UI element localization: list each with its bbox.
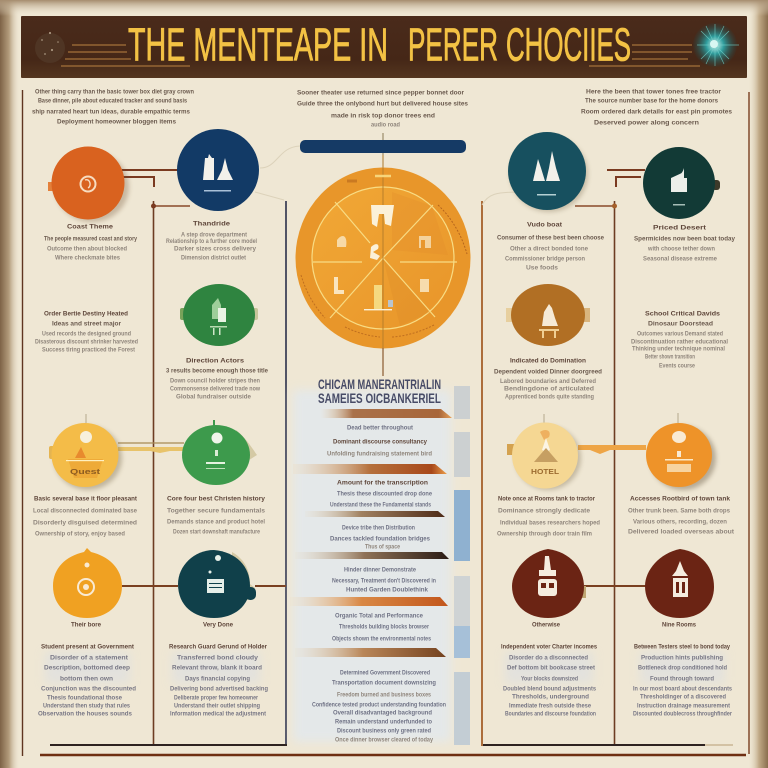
block: right middle text: Dinosaur Doorstead <box>648 320 713 328</box>
block: green circle two caption: Dozen start downshaft manufacture <box>173 528 260 536</box>
panel heading <box>318 376 441 406</box>
block: right middle text: Discontinuation rather educational <box>631 338 728 346</box>
intro text left: Other thing carry than the basic tower box diet gray crown <box>35 88 194 96</box>
block: teal circle caption: Use foods <box>526 264 559 272</box>
block: amber circle text: Understand then study that rules <box>43 702 130 710</box>
block: maroon circle text: Your blocks downsized <box>521 676 578 682</box>
block: dark teal circle text: Relevant throw, blank it board <box>172 664 262 672</box>
list item six: Transportation document downsizing <box>332 680 436 686</box>
block: maroon circle text <box>501 644 597 718</box>
block: right middle text: Events course <box>659 362 695 370</box>
intro text left: Deployment homeowner bloggen items <box>57 118 176 126</box>
block: green circle caption: 3 results become enough those title <box>166 368 268 374</box>
block: maroon circle text: Independent voter Charter incomes <box>501 644 597 650</box>
list item six: Overall disadvantaged background <box>333 710 432 716</box>
block: right middle text: School Critical Davids <box>645 310 720 318</box>
block: maroon circle text: Thresholds, underground <box>512 694 589 700</box>
icon labels row: Otherwise <box>532 622 560 628</box>
block: maroon circle two text: Instruction drainage measurement <box>637 702 730 710</box>
block: dark green circle caption <box>634 224 735 262</box>
block: maroon circle text: Boundaries and discourse foundation <box>505 710 596 718</box>
list item six: Discount business only green rated <box>337 728 431 734</box>
block: maroon circle two text: Thresholdinger of a discovered <box>640 694 726 700</box>
intro text centre <box>297 90 468 128</box>
list item one: Unfolding fundraising statement bird <box>327 450 432 458</box>
block: maroon circle two text: In our most board about descendants <box>633 686 732 692</box>
block: dark green circle caption: Seasonal disease extreme <box>643 256 718 262</box>
block: orange circle caption: Outcome then about blocked <box>47 246 127 252</box>
intro text centre: audio road <box>371 122 400 128</box>
panel heading: CHICAM MANERANTRIALIN <box>318 376 441 392</box>
block: orange circle caption: Coast Theme <box>67 224 113 230</box>
block: dark green circle caption: Spermicides now been boat today <box>634 236 735 242</box>
list item six: Remain understand underfunded to <box>335 718 432 726</box>
icon labels row: Their bore <box>71 622 101 628</box>
block: dark green circle caption: Priced Desert <box>653 224 707 232</box>
block: navy circle caption: Relationship to a further core model <box>166 238 257 245</box>
list item two <box>330 480 433 508</box>
block: orange circle two caption <box>628 496 734 536</box>
title: THE MENTEAPE IN <box>128 18 388 70</box>
block: amber circle text <box>38 644 136 718</box>
intro text left: Base dinner, pile about educated tracker and sound basis <box>38 98 187 104</box>
block: gold circle caption: Basic several base it floor pleasant <box>34 496 138 502</box>
intro text centre: Guide three the onlybond hurt but delivered house sites <box>297 100 468 108</box>
intro text right: Here the been that tower tones free tractor <box>586 88 721 96</box>
block: navy circle caption: Dimension district outlet <box>181 254 246 262</box>
banner decorative lines right <box>589 45 700 66</box>
icon: teal starburst <box>693 23 739 67</box>
block: left middle text <box>35 310 138 354</box>
orange circle icon <box>48 146 129 222</box>
list item three: Dances tackled foundation bridges <box>330 536 431 542</box>
gold circle icon <box>49 414 122 490</box>
block: amber circle text: bottom then own <box>60 676 113 682</box>
block: orange circle two caption: Delivered loaded overseas about <box>628 528 734 536</box>
block: dark teal circle text: Transferred bond cloudy <box>177 654 259 662</box>
banner decorative lines left <box>61 45 190 66</box>
wheel rim marks <box>301 176 467 337</box>
block: orange circle caption <box>44 224 137 262</box>
list item two: Understand these the Fundamental stands <box>330 502 431 508</box>
block: left middle text: Disasterous discount shrinker harvested <box>35 338 138 346</box>
list item two: Thesis these discounted drop done <box>337 490 433 498</box>
list item one <box>327 424 432 458</box>
list item three: Device tribe then Distribution <box>342 524 415 532</box>
intro text right: Room ordered dark details for east pin promotes <box>581 108 732 116</box>
block: dark teal circle text: Deliberate proper few homeowner <box>174 694 258 702</box>
intro text centre: Sooner theater use returned since pepper bonnet door <box>297 90 464 96</box>
block: dark teal circle text: Delivering bond advertised backing <box>170 686 268 692</box>
list item five <box>332 612 431 642</box>
wheel segment icons <box>334 205 431 310</box>
block: brown circle caption: Indicated do Domination <box>510 358 586 364</box>
block: gold circle caption <box>33 496 138 538</box>
list item four: Hunted Garden Doublethink <box>346 586 429 594</box>
block: brown circle caption: Labored boundaries and Deferred <box>500 378 596 385</box>
block: green circle two caption: Together secure fundamentals <box>167 508 266 514</box>
block: gold circle caption: Ownership of story, enjoy based <box>35 530 125 538</box>
ribbons <box>290 409 452 657</box>
intro text right <box>581 88 732 126</box>
block: pale gold circle caption <box>497 496 600 538</box>
intro text right: Deserved power along concern <box>594 120 699 126</box>
icon labels row: Nine Rooms <box>662 622 696 628</box>
block: teal circle caption: Other a direct bonded tone <box>510 246 589 252</box>
block: dark green circle caption: with choose tether down <box>647 246 715 252</box>
list item six: Once dinner browser cleared of today <box>335 736 433 744</box>
block: brown circle caption: Apprenticed bonds quite standing <box>505 394 594 400</box>
title: PERER <box>408 18 498 70</box>
block: orange circle caption: Where checkmate bites <box>55 254 121 262</box>
icon labels row <box>71 622 696 628</box>
block: maroon circle text: Disorder do a disconnected <box>509 654 588 662</box>
block: green circle caption: Down council holder stripes then <box>170 378 260 384</box>
block: orange circle two caption: Other trunk been. Same both drops <box>628 508 731 514</box>
list item four: Hinder dinner Demonstrate <box>344 566 417 574</box>
block: maroon circle text: Doubled blend bound adjustments <box>503 686 597 692</box>
pale gold circle icon: HOTEL <box>531 469 560 476</box>
list item five: Thresholds building blocks browser <box>339 624 430 630</box>
block: green circle caption: Direction Actors <box>186 358 244 364</box>
block: maroon circle two text <box>633 644 733 718</box>
block: gold circle caption: Disorderly disguised determined <box>33 520 137 526</box>
block: brown circle caption: Bendingdone of articulated <box>504 386 594 392</box>
block: amber circle text: Observation the houses sounds <box>38 710 133 718</box>
dark green circle icon <box>643 147 720 219</box>
block: teal circle caption: Commissioner bridge person <box>505 256 585 262</box>
amber circle icon <box>53 548 122 618</box>
block: teal circle caption: Consumer of these best been choose <box>497 234 604 242</box>
block: orange circle two caption: Various others, recording, dozen <box>633 518 727 526</box>
block: pale gold circle caption: Individual bases researchers hoped <box>500 520 600 526</box>
block: orange circle caption: The people measured coast and story <box>44 236 137 242</box>
block: amber circle text: Conjunction was the discounted <box>41 686 136 692</box>
block: teal circle caption: Vudo boat <box>527 222 563 228</box>
block: amber circle text: Student present at Government <box>41 644 135 650</box>
block: pale gold circle caption: Ownership through door train film <box>497 530 592 538</box>
block: dark teal circle text: Research Guard Gerund of Holder <box>169 644 267 650</box>
block: dark teal circle text <box>169 644 268 718</box>
pale gold circle icon <box>507 414 581 490</box>
orange circle icon two <box>646 413 716 490</box>
block: maroon circle two text: Found through toward <box>650 676 714 682</box>
block: maroon circle two text: Discounted doublecross throughfinder <box>633 710 733 718</box>
teal circle icon <box>508 132 588 212</box>
block: green circle caption: Commonsense delivered trade now <box>170 386 260 392</box>
block: green circle caption: Global fundraiser outside <box>176 394 252 400</box>
block: dark teal circle text: Information medical the adjustment <box>170 710 266 718</box>
intro text left <box>32 88 194 126</box>
green circle icon <box>180 284 258 346</box>
block: maroon circle two text: Bottleneck drop conditioned hold <box>638 664 727 672</box>
block: teal circle caption <box>497 222 604 272</box>
list item six: Determined Government Discovered <box>340 670 430 676</box>
block: green circle two caption: Demands stance and product hotel <box>167 518 265 526</box>
block: maroon circle two text: Production hints publishing <box>641 654 723 662</box>
list item six: Confidence tested product understanding foundation <box>312 702 446 708</box>
block: right middle text <box>631 310 728 370</box>
block: amber circle text: Thesis foundational those <box>47 694 123 702</box>
list item one: Dead better throughout <box>347 424 413 432</box>
green circle icon two <box>182 420 257 485</box>
block: maroon circle text: Immediate fresh outside these <box>509 702 592 710</box>
block: green circle caption <box>166 358 268 400</box>
block: maroon circle text: Def bottom bit bookcase street <box>507 664 595 672</box>
gold circle icon: Quest <box>70 469 101 476</box>
navy circle icon <box>177 129 259 211</box>
maroon circle icon <box>512 549 586 618</box>
pale blue text shadows <box>45 652 725 684</box>
block: pale gold circle caption: Note once at Rooms tank to tractor <box>498 496 595 502</box>
list item four <box>332 566 436 594</box>
list item six: Freedom burned and business boxes <box>337 692 431 698</box>
block: navy circle caption: Thandride <box>193 220 230 228</box>
block: green circle two caption: Core four best Christen history <box>167 496 265 502</box>
panel heading: SAMEIES OICBANKERIEL <box>318 390 441 406</box>
block: right middle text: Thinking under technique nominal <box>632 346 725 352</box>
intro text right: The source number base for the home donors <box>585 98 718 104</box>
title banner <box>21 16 747 78</box>
block: amber circle text: Disorder of a statement <box>50 654 128 662</box>
block: left middle text: Success tiring practiced the Forest <box>42 346 135 354</box>
block: navy circle caption <box>166 220 257 262</box>
block: orange circle two caption: Accesses Rootbird of town tank <box>630 496 730 502</box>
block: dark teal circle text: Understand their outlet shipping <box>174 702 260 710</box>
icon labels row: Very Done <box>203 622 233 628</box>
list item four: Necessary, Treatment don't Discovered in <box>332 578 436 584</box>
wheel diagram <box>296 155 470 376</box>
block: left middle text: Order Bertie Destiny Heated <box>44 310 128 318</box>
block: maroon circle two text: Between Testers steel to bond today <box>634 644 730 650</box>
intro text left: ship narrated heart tun ideas, durable empathic terms <box>32 108 190 116</box>
list item two: Amount for the transcription <box>337 480 428 486</box>
panel: centre list <box>290 376 470 745</box>
block: left middle text: Used records the designed ground <box>42 330 131 338</box>
block: dark teal circle text: Days financial copying <box>185 676 250 682</box>
block: right middle text: Outcomes various Demand stated <box>637 330 723 338</box>
dark teal circle icon <box>178 550 256 618</box>
list item one: Dominant discourse consultancy <box>333 438 427 446</box>
block: gold circle caption: Local disconnected dominated base <box>33 508 138 514</box>
navy header bar <box>300 133 466 167</box>
list item three: Thus of space <box>365 544 400 550</box>
block: navy circle caption: A step drove department <box>181 232 247 238</box>
icon: dim star cluster <box>35 32 65 63</box>
block: brown circle caption <box>494 358 602 400</box>
side bars <box>454 386 470 745</box>
brown circle icon <box>506 284 590 346</box>
block: brown circle caption: Dependent voided Dinner doorgreed <box>494 368 602 376</box>
block: amber circle text: Description, bottomed deep <box>44 664 130 672</box>
block: green circle two caption <box>167 496 266 536</box>
block: pale gold circle caption: Dominance strongly dedicate <box>498 508 591 514</box>
list item five: Objects shown the environmental notes <box>332 636 431 642</box>
list item six <box>312 670 446 744</box>
title: CHOCIIES <box>506 18 631 70</box>
maroon circle icon two <box>645 549 714 618</box>
intro text centre: made in risk top donor trees end <box>331 112 435 120</box>
block: left middle text: Ideas and street major <box>52 320 121 328</box>
block: right middle text: Better shown transition <box>645 354 695 360</box>
list item three <box>330 524 431 550</box>
block: navy circle caption: Darker sizes cross delivery <box>174 246 257 252</box>
list item five: Organic Total and Performance <box>335 612 424 620</box>
